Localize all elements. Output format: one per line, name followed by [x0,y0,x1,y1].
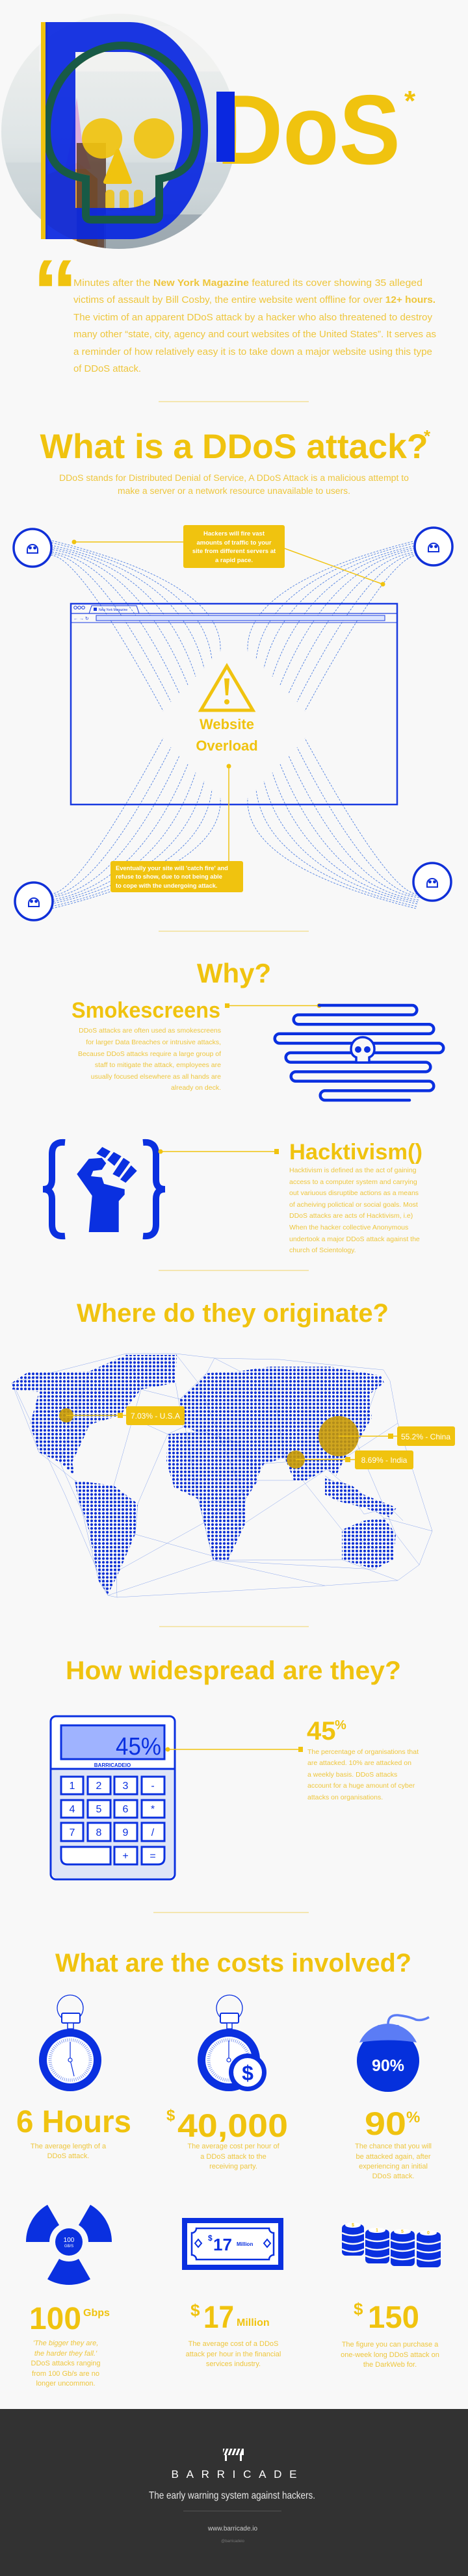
hacktivism connector [159,1149,279,1154]
hacktivism text [289,1166,420,1254]
stat: $40,000: $ [166,2107,176,2124]
icon: fist in braces [43,1142,165,1236]
map marker: India: 8.69% - India [361,1456,408,1465]
45% text: attacks on organisations. [307,1794,383,1801]
icon: calculator: 45% [116,1733,161,1760]
icon: radiation 100 GB/S: 100 [64,2237,75,2244]
map marker: China: 55.2% - China [401,1432,450,1441]
stat: 6 Hours [16,2105,131,2160]
heading: What are the costs involved?: What are the costs involved? [55,1949,411,1977]
icon: calculator: 5 [96,1804,102,1815]
heading: Where do they originate?: Where do they originate? [77,1299,389,1328]
hero title DoS: DoS [216,75,400,185]
stat: 100Gbps: 'The bigger they are, [33,2339,98,2347]
icon: calculator: BARRICADEIO [94,1762,131,1768]
icon: stopwatch with dollar coin [198,1995,266,2091]
label: Website Overload: Website [200,716,254,732]
icon: warning triangle [201,666,253,710]
map marker: India [287,1450,413,1469]
footer [0,2409,468,2576]
stat: $150: the DarkWeb for. [363,2361,417,2369]
icon: stopwatch [39,1995,101,2091]
smokescreens text: DDoS attacks are often used as smokescreens [79,1027,221,1035]
icon: coin stacks: $ [352,2223,354,2228]
stat: $17 Million: 17 [203,2300,234,2335]
hacktivism text: DDoS attacks are acts of Hacktivism, i.e) [289,1212,413,1220]
icon: calculator: 3 [123,1781,129,1792]
smokescreens text: usually focused elsewhere as all hands are [91,1073,221,1081]
map marker: China [318,1416,455,1456]
stat: $40,000: a DDoS attack to the [200,2153,266,2161]
hacktivism text: When the hacker collective Anonymous [289,1224,408,1231]
icon: stopwatch with dollar coin: $ [242,2061,254,2085]
45% text: The percentage of organisations that [307,1748,419,1756]
icon: banknote $17 Million [182,2218,283,2270]
icon: bomb 90% [357,2015,429,2092]
stat: $17 Million: $ [190,2300,200,2320]
label: Website Overload [196,716,258,754]
smokescreens text: Because DDoS attacks require a large group of [78,1050,221,1058]
icon: radiation 100 GB/S: GB/S [64,2245,73,2248]
stat: 100Gbps: the harder they fall.' [34,2350,98,2358]
icon: calculator: - [151,1781,155,1792]
45% text [307,1748,419,1801]
map marker: USA: 7.03% - U.S.A [131,1411,180,1421]
stat: 90%: % [406,2109,420,2126]
stat: $150 [341,2299,439,2369]
stat: 90%: experiencing an initial [359,2163,428,2170]
45% connector [165,1747,303,1752]
subtitle: DDoS stands for Distributed Denial of Service, A DDoS Attack is a malicious attempt to [59,473,409,483]
icon: banknote $17 Million: 17 [213,2235,232,2254]
hacktivism text: Hacktivism is defined as the act of gaining [289,1166,417,1174]
map marker: USA [59,1406,185,1425]
45% text: account for a huge amount of cyber [307,1782,415,1790]
quote mark: “ [32,240,78,342]
stat: $150: $ [354,2299,363,2319]
hacktivism heading: Hacktivism() [289,1140,422,1165]
hero logo: photo circle with D skull [0,14,238,253]
stat: 90%: 90 [365,2106,406,2142]
stat: $150: The figure you can purchase a [342,2341,439,2349]
hacktivism text: access to a computer system and carrying [289,1178,417,1186]
browser window: ← → ↻ [73,617,89,621]
callout: site catches fire: Eventually your site will 'catch fire' and [116,865,228,871]
browser window: New York Magazine [99,608,127,612]
stat: $40,000: receiving party. [209,2163,257,2170]
stat: $40,000: The average cost per hour of [187,2143,280,2150]
smokescreens text: already on deck. [171,1084,221,1092]
hacktivism text: church of Scientology. [289,1246,356,1254]
stat: $40,000: 40,000 [177,2107,288,2144]
subtitle: make a server or a network resource unavailable to users. [118,486,350,496]
stat: $150: 150 [368,2300,419,2335]
icon: coin stacks [342,2222,441,2267]
callout: site catches fire: to cope with the undergoing attack. [116,882,218,889]
smokescreens text [78,1027,221,1092]
footer: @barricadeio [221,2540,245,2544]
icon: maze with skull [275,1005,443,1100]
stat: 45%: % [335,1718,346,1732]
hacktivism text: of acheiving polictical or social goals. Most [289,1201,418,1209]
stat: 100Gbps: DDoS attacks ranging [31,2360,100,2367]
stat: 6 Hours: DDoS attack. [47,2152,89,2160]
stat: 100Gbps: 100 [29,2302,81,2336]
icon: barricade logo [223,2449,244,2461]
stat: 100Gbps: longer uncommon. [36,2380,96,2388]
icon: banknote $17 Million: Million [237,2241,253,2247]
stat: 90%: DDoS attack. [372,2172,414,2180]
icon: calculator: = [150,1851,156,1862]
icon: calculator: 9 [123,1827,129,1838]
45% text: are attacked. 10% are attacked on [307,1759,411,1767]
callout: hackers fire traffic: Hackers will fire vast [203,530,265,537]
callout: hackers fire traffic: site from different servers at [192,548,276,555]
stat: 6 Hours: 6 Hours [16,2105,131,2139]
stat: $17 Million: attack per hour in the financial [186,2351,281,2358]
icon: calculator: + [122,1851,129,1862]
skull icon: top left [14,529,51,567]
intro paragraph: of DDoS attack. [73,363,141,374]
skull icon: top right [415,528,452,565]
world map [12,1354,432,1597]
icon: bomb 90%: 90% [372,2057,404,2075]
heading: Why?: Why? [197,958,271,988]
intro paragraph: The victim of an apparent DDoS attack by a hacker who also threatened to destroy [73,312,432,323]
icon: banknote $17 Million: $ [208,2234,213,2243]
stat: $17 Million: services industry. [206,2360,261,2368]
stat: 45%: 45 [307,1717,335,1745]
callout: site catches fire [110,764,243,892]
callout: hackers fire traffic [72,525,385,586]
icon: calculator: 8 [96,1827,102,1838]
icon: calculator: * [151,1804,155,1815]
intro paragraph [73,277,436,374]
label: Website Overload: Overload [196,738,258,754]
icon: calculator: / [151,1827,155,1838]
smokescreens connector [225,1003,321,1008]
stat: $17 Million [186,2300,281,2368]
icon: coin stacks: 5 [401,2230,404,2234]
hacktivism text: undertook a major DDoS attack against the [289,1235,420,1243]
smokescreens text: for larger Data Breaches or intrusive attacks, [86,1038,221,1046]
hero title DoS: * [404,85,416,117]
stat: $17 Million: Million [237,2317,270,2328]
callout: hackers fire traffic: a rapid pace. [215,557,253,564]
heading: What is a DDoS attack?: What is a DDoS attack? [40,428,428,466]
intro paragraph: Minutes after the New York Magazine featured its cover showing 35 alleged [73,277,422,289]
callout: hackers fire traffic: amounts of traffic to your [196,539,272,547]
stat: 100Gbps: Gbps [83,2308,110,2319]
smokescreens heading: Smokescreens [72,998,220,1023]
icon: coin stacks: 1 [376,2228,378,2233]
heading: What is a DDoS attack?: * [424,426,431,446]
skull icon: bottom left [15,882,53,920]
skull icon: bottom right [413,863,451,901]
subtitle [59,473,409,496]
stat: 90% [355,2106,432,2180]
stat: 6 Hours: The average length of a [31,2143,107,2150]
footer: www.barricade.io [207,2525,258,2532]
icon: calculator: 2 [96,1781,102,1792]
intro paragraph: victims of assault by Bill Cosby, the entire website went offline for over 12+ hours. [73,294,436,305]
stat: 90%: The chance that you will [355,2143,432,2150]
stat: $17 Million: The average cost of a DDoS [188,2340,278,2348]
icon: calculator: 1 [70,1781,75,1792]
stat: 90%: be attacked again, after [356,2153,431,2161]
icon: calculator [51,1716,175,1879]
browser window [71,604,397,805]
icon: coin stacks: 0 [427,2231,430,2235]
smokescreens text: staff to mitigate the attack, employees are [95,1061,221,1069]
attack diagram: dashed traffic lines [47,541,421,908]
heading: How widespread are they?: How widespread are they? [66,1656,401,1685]
icon: calculator: 7 [70,1827,75,1838]
stat: $150: one-week long DDoS attack on [341,2351,439,2359]
intro paragraph: many other “state, city, agency and court websites of the United States”. It serves as [73,329,436,340]
footer: The early warning system against hackers. [149,2490,315,2501]
stat: 100Gbps [29,2302,110,2388]
icon: calculator: 4 [70,1804,75,1815]
footer: BARRICADE [172,2468,296,2480]
stat: $40,000 [166,2107,288,2170]
callout: site catches fire: refuse to show, due to not being able [116,873,222,880]
intro paragraph: a reminder of how relatively easy it is to take down a major website using this type [73,346,432,357]
45% text: a weekly basis. DDoS attacks [307,1771,397,1779]
hacktivism text: out variuous disruptibe actions as a means [289,1189,419,1197]
stat: 100Gbps: from 100 Gb/s are no [32,2370,99,2378]
icon: radiation 100 GB/S [26,2205,112,2285]
icon: calculator: 6 [123,1804,129,1815]
